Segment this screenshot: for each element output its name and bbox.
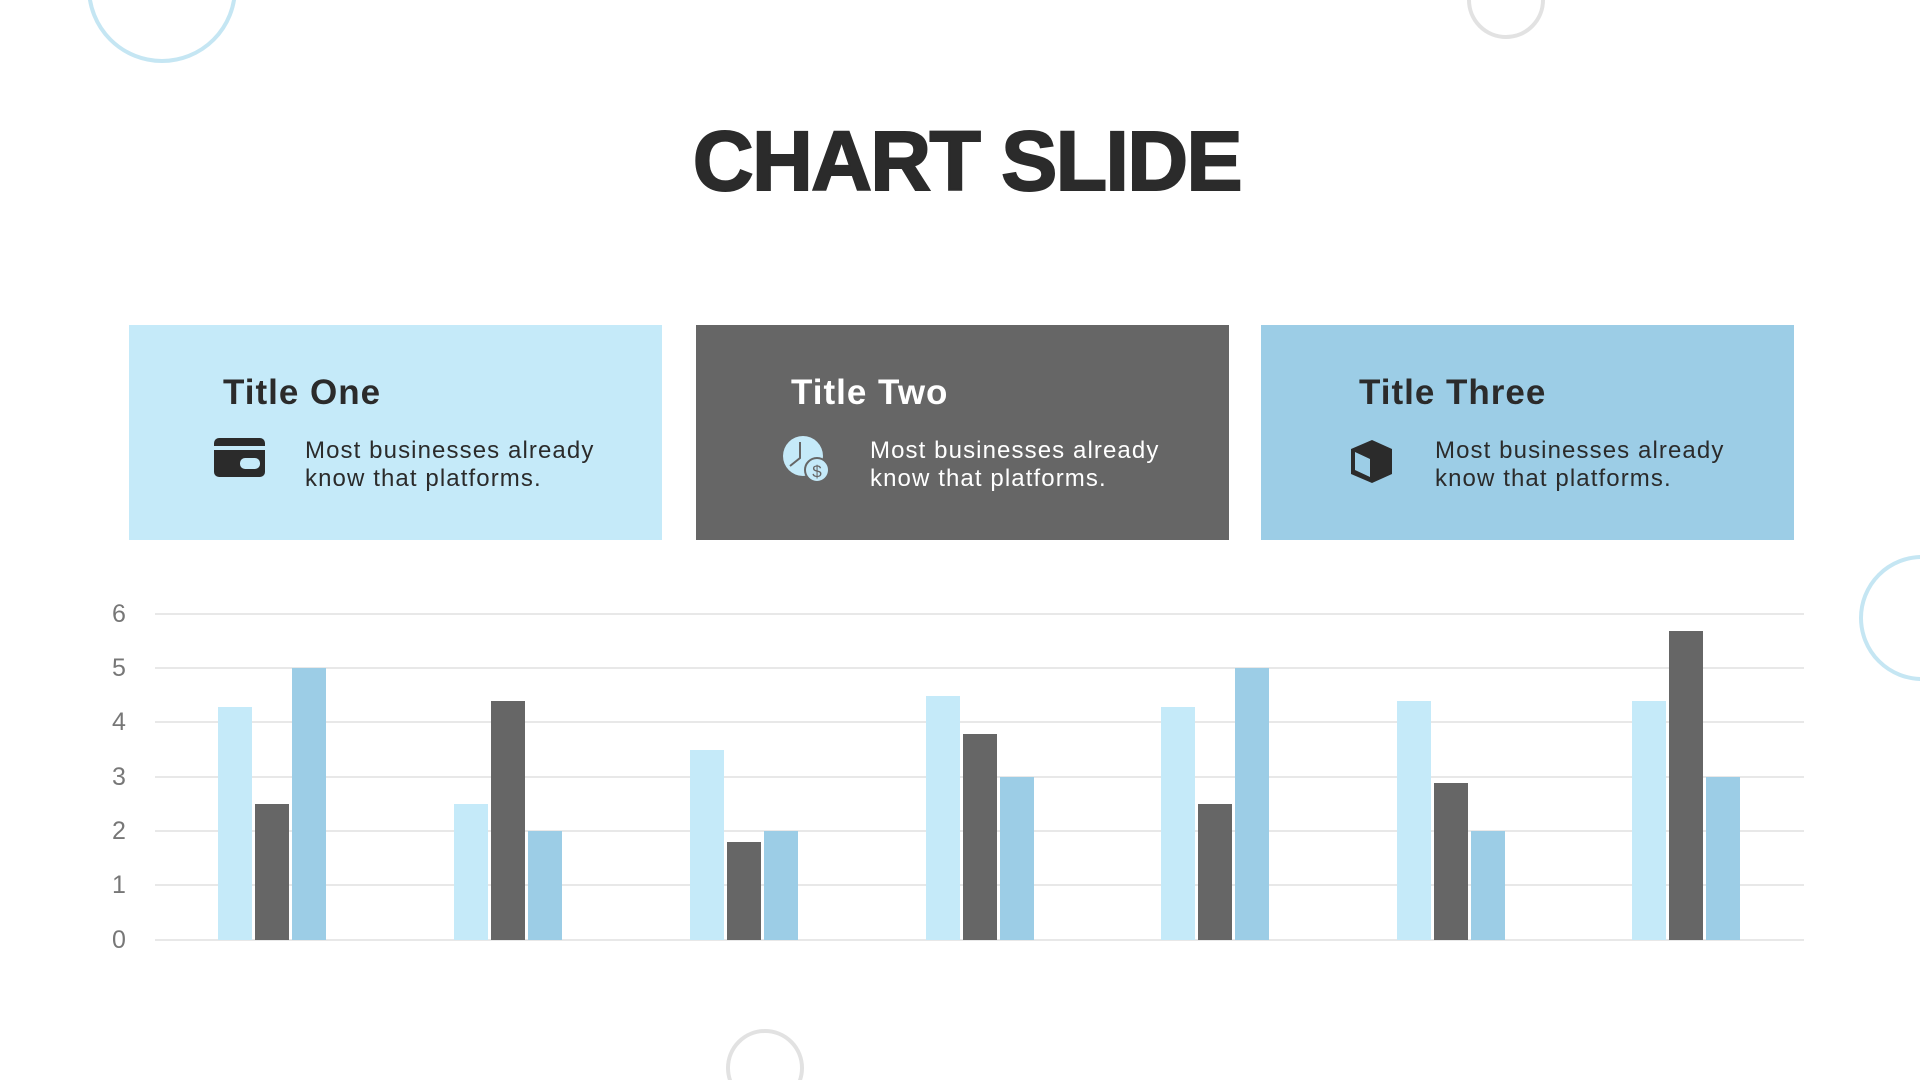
icon: box (1351, 440, 1392, 483)
bar chart: 5 (112, 654, 126, 682)
title: CHART SLIDE (693, 114, 1241, 208)
bar chart: 0 (112, 926, 126, 954)
icon: clock dollar: $ (812, 462, 822, 481)
bar chart: 4 (112, 708, 126, 736)
bar chart: 2 (112, 817, 126, 845)
panel: title one: Most businesses already (305, 437, 594, 464)
icon: clock dollar (783, 436, 829, 482)
panel: title three: Most businesses already (1435, 437, 1724, 464)
bar chart: 1 (112, 871, 126, 899)
panel: title one (129, 325, 662, 540)
panel: title one: Title One (223, 373, 381, 412)
panel: title three: Title Three (1359, 373, 1546, 412)
bar chart (112, 600, 1804, 954)
panel: title three: know that platforms. (1435, 465, 1672, 492)
panel: title one: know that platforms. (305, 465, 542, 492)
panel: title two (696, 325, 1229, 540)
panel: title two: Title Two (791, 373, 948, 412)
bar chart: 3 (112, 763, 126, 791)
panel: title two: know that platforms. (870, 465, 1107, 492)
panel: title two: Most businesses already (870, 437, 1159, 464)
bar chart: 6 (112, 600, 126, 628)
icon: card (214, 438, 265, 477)
panel: title three (1261, 325, 1794, 540)
